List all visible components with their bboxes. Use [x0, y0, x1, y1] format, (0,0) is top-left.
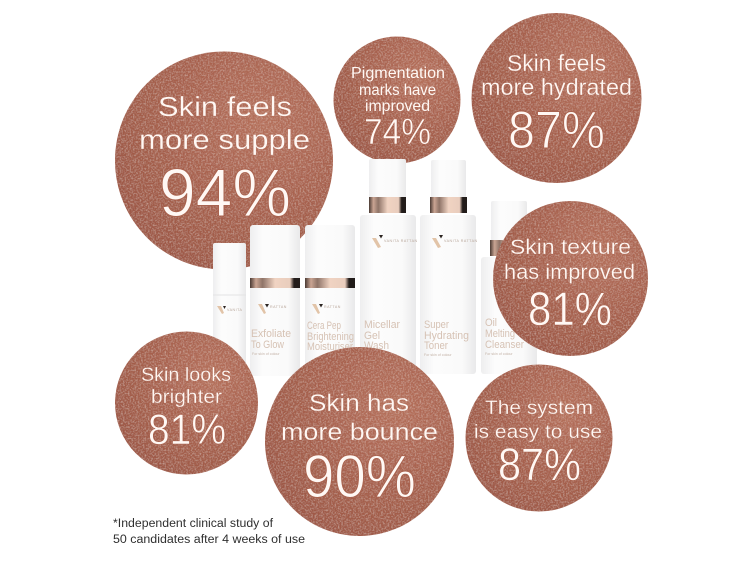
bottle: super hydrating toner: For skin of colour — [424, 353, 452, 357]
circle: skin feels more hydrated 87%: Skin feels — [507, 50, 606, 76]
bottle: cera pep brightening moisturiser: Brightening — [307, 331, 354, 343]
circle: pigmentation marks have improved 74%: Pigmentation — [351, 65, 445, 82]
bottle: cera pep brightening moisturiser: RATTAN — [324, 305, 341, 309]
circle: skin texture has improved 81%: Skin texture — [510, 236, 631, 259]
bottle: super hydrating toner: Toner — [424, 340, 448, 352]
bottle: super hydrating toner — [420, 160, 478, 374]
circle: the system is easy to use 87%: is easy to use — [474, 421, 602, 443]
circle: the system is easy to use 87% — [466, 364, 612, 512]
circle: pigmentation marks have improved 74% — [334, 36, 460, 164]
product bottles — [213, 159, 537, 376]
bottle: small serum — [213, 243, 246, 376]
bottle: super hydrating toner: VANITA RATTAN — [444, 239, 478, 243]
circle: skin feels more hydrated 87%: 87% — [508, 101, 605, 160]
circle: skin texture has improved 81%: 81% — [528, 282, 612, 335]
circle: skin feels more supple 94%: 94% — [159, 155, 291, 231]
bottle: small serum: VANITA — [227, 308, 243, 312]
circle: skin feels more hydrated 87%: more hydrated — [481, 74, 632, 100]
circle: skin texture has improved 81% — [493, 201, 648, 356]
bottle: micellar gel wash — [360, 159, 418, 374]
footnote: *Independent clinical study of — [113, 518, 274, 530]
circle: the system is easy to use 87%: 87% — [498, 439, 581, 490]
bottle: super hydrating toner: Hydrating — [424, 330, 469, 342]
bottle: exfoliate to glow: Exfoliate — [251, 328, 291, 340]
bottle: exfoliate to glow: To Glow — [251, 339, 284, 351]
circle: skin has more bounce 90%: Skin has — [309, 390, 409, 417]
bottle: micellar gel wash: VANITA RATTAN — [384, 239, 418, 243]
bottle: cera pep brightening moisturiser — [305, 225, 355, 376]
bottle: oil melting cleanser: Oil — [485, 317, 497, 329]
bottle: cera pep brightening moisturiser: Moisturiser — [307, 341, 353, 353]
footnote — [113, 518, 305, 546]
circle: skin has more bounce 90% — [265, 347, 454, 536]
bottle: oil melting cleanser — [481, 201, 537, 374]
circle: skin looks brighter 81%: brighter — [151, 387, 223, 408]
bottle: oil melting cleanser: For skin of colour — [485, 352, 513, 356]
circle: skin looks brighter 81%: Skin looks — [141, 365, 231, 386]
bottle: exfoliate to glow — [250, 225, 300, 376]
circle: pigmentation marks have improved 74%: 74% — [364, 111, 431, 152]
circle: the system is easy to use 87%: The system — [485, 397, 593, 419]
bottle: micellar gel wash: Gel — [364, 330, 380, 342]
footnote: 50 candidates after 4 weeks of use — [113, 534, 305, 546]
bottle: micellar gel wash: Wash — [364, 340, 389, 352]
bottle: exfoliate to glow: For skin of colour — [252, 352, 280, 356]
circle: skin texture has improved 81%: has improved — [504, 261, 635, 284]
bottle: super hydrating toner: Super — [424, 319, 449, 331]
bottle: micellar gel wash: Micellar — [364, 319, 400, 331]
bottle: oil melting cleanser: Cleanser — [485, 339, 524, 351]
circle: skin looks brighter 81% — [115, 332, 258, 474]
bottle: exfoliate to glow: RATTAN — [270, 305, 287, 309]
circle: pigmentation marks have improved 74%: marks have — [359, 82, 436, 99]
bottle: cera pep brightening moisturiser: Cera Pep — [307, 320, 341, 332]
circle: skin looks brighter 81%: 81% — [148, 406, 226, 454]
bottle: oil melting cleanser: Melting — [485, 328, 515, 340]
circle: skin has more bounce 90%: more bounce — [281, 419, 438, 446]
circle: pigmentation marks have improved 74%: improved — [365, 98, 430, 115]
circle: skin feels more hydrated 87% — [472, 13, 642, 183]
circle: skin feels more supple 94%: Skin feels — [158, 91, 292, 122]
circle: skin feels more supple 94% — [115, 52, 333, 270]
circle: skin has more bounce 90%: 90% — [303, 443, 416, 510]
circle: skin feels more supple 94%: more supple — [139, 124, 310, 155]
